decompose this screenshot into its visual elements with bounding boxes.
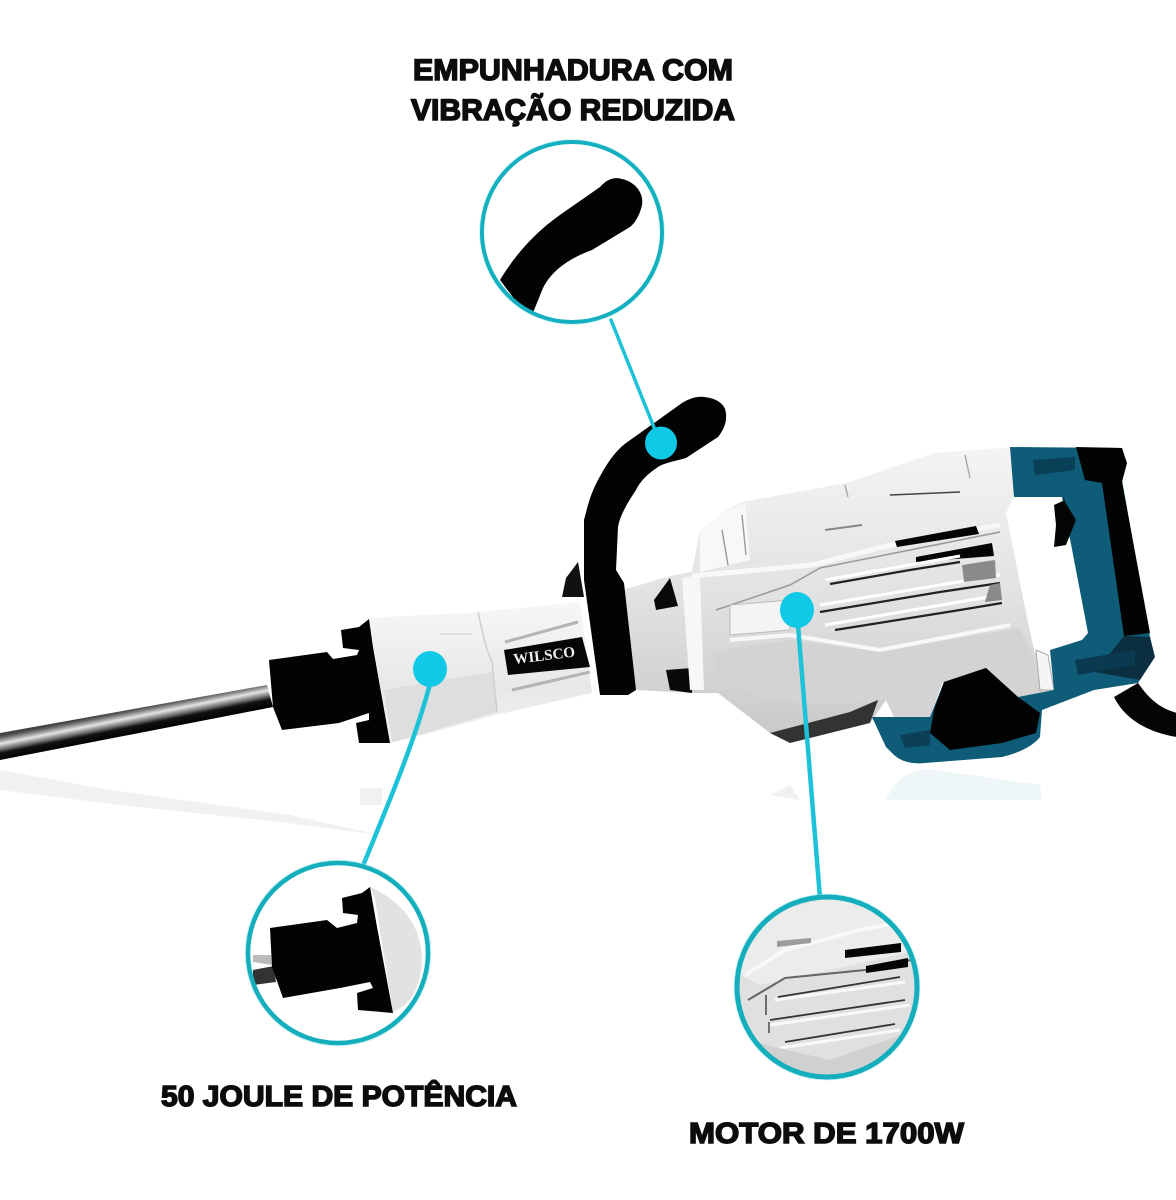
title: grip label: EMPUNHADURA COM — [413, 54, 733, 87]
front handle — [562, 397, 726, 695]
top ribs — [825, 525, 862, 530]
brand badge: WILSCO — [513, 645, 576, 668]
title: grip label — [411, 54, 735, 127]
chisel — [0, 685, 273, 760]
barrel — [369, 602, 592, 743]
trigger — [1054, 497, 1076, 547]
brand badge — [504, 637, 590, 675]
callout circle: chuck — [246, 860, 430, 1046]
lower shaded panel — [712, 628, 1040, 717]
neck vents — [654, 578, 692, 693]
marker dots — [413, 426, 814, 687]
label: motor: MOTOR DE 1700W — [689, 1118, 965, 1150]
title: grip label: VIBRAÇÃO REDUZIDA — [411, 93, 735, 127]
chuck — [269, 619, 390, 743]
black vents — [895, 526, 994, 562]
black foot guard — [930, 668, 1040, 750]
leader lines — [362, 320, 820, 898]
motor body — [622, 447, 1054, 743]
black grip overlays — [1076, 447, 1150, 636]
callout circle: grip — [480, 140, 664, 324]
label: 50 joule: 50 JOULE DE POTÊNCIA — [161, 1079, 517, 1113]
power cord — [1114, 683, 1176, 737]
blue rear handle — [872, 447, 1155, 763]
reflection on floor — [0, 769, 1042, 835]
callout circle: motor — [734, 880, 925, 1080]
